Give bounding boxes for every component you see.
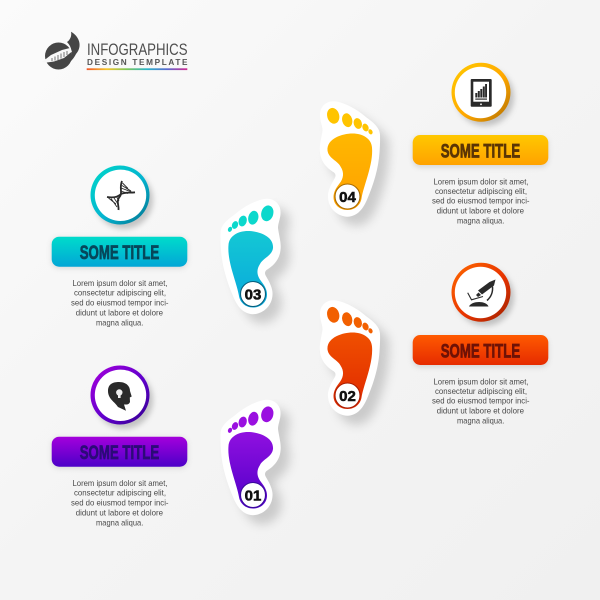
text block: consectetur adipiscing elit, <box>435 386 527 396</box>
footprint 04 <box>320 101 389 226</box>
footprint 01 <box>220 400 290 524</box>
title bar: SOME TITLE <box>441 140 520 162</box>
badge 02: 02 <box>339 388 356 405</box>
text block <box>71 478 169 527</box>
text block: magna aliqua. <box>96 517 143 527</box>
icon circle: head <box>90 366 153 429</box>
text block: didunt ut labore et dolore <box>76 308 163 318</box>
logo title: INFOGRAPHICS <box>87 41 188 59</box>
icon: DNA <box>107 181 135 210</box>
panel: step 04 <box>413 63 548 226</box>
title bar: SOME TITLE <box>441 340 520 362</box>
text block: sed do eiusmod tempor inci- <box>71 498 169 508</box>
logo mark <box>42 32 80 70</box>
text block: sed do eiusmod tempor inci- <box>71 298 169 308</box>
icon: head with bulb <box>108 382 132 411</box>
panel: step 01 <box>52 366 187 527</box>
text block: consectetur adipiscing elit, <box>74 288 166 298</box>
icon: tablet chart <box>471 79 492 107</box>
footprint 02 <box>320 300 389 425</box>
badge 01: 01 <box>245 488 261 504</box>
text block: sed do eiusmod tempor inci- <box>432 196 530 206</box>
text block: didunt ut labore et dolore <box>437 206 524 216</box>
text block: magna aliqua. <box>457 216 504 226</box>
title bar: SOME TITLE <box>80 242 159 264</box>
footprint 03 <box>220 199 290 323</box>
text block: Lorem ipsum dolor sit amet, <box>434 176 528 186</box>
icon: microscope <box>468 280 496 306</box>
icon circle: tablet <box>452 63 514 126</box>
rainbow rule <box>87 68 187 70</box>
text block: magna aliqua. <box>96 317 143 327</box>
text block <box>432 376 530 426</box>
icon circle: DNA <box>90 166 153 229</box>
text block: didunt ut labore et dolore <box>437 406 524 416</box>
panel: step 02 <box>413 263 548 426</box>
panel: step 03 <box>52 166 187 327</box>
text block <box>71 278 169 327</box>
title bar <box>52 237 187 268</box>
logo <box>42 32 188 70</box>
title bar <box>413 335 548 367</box>
text block: Lorem ipsum dolor sit amet, <box>434 376 528 386</box>
text block: didunt ut labore et dolore <box>76 508 163 518</box>
title bar <box>413 135 548 167</box>
badge 03: 03 <box>245 286 261 304</box>
text block <box>432 176 530 226</box>
text block: consectetur adipiscing elit, <box>435 186 527 196</box>
text block: sed do eiusmod tempor inci- <box>432 396 530 406</box>
title bar: SOME TITLE <box>80 442 159 464</box>
text block: Lorem ipsum dolor sit amet, <box>72 478 168 488</box>
icon circle: microscope <box>452 263 514 326</box>
text block: consectetur adipiscing elit, <box>74 488 166 498</box>
text block: magna aliqua. <box>457 416 504 426</box>
badge 04: 04 <box>339 189 356 206</box>
text block: Lorem ipsum dolor sit amet, <box>72 278 168 288</box>
logo subtitle: DESIGN TEMPLATE <box>87 58 188 67</box>
title bar <box>52 437 187 468</box>
